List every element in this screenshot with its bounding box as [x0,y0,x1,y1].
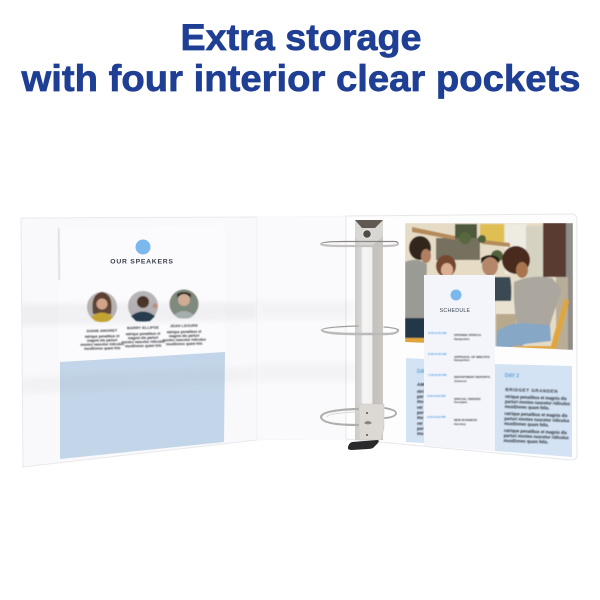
day 2 text: parturi montes nascetur ridiculus [505,399,571,406]
speaker text: Barry: ratrique penatibus et [126,332,161,336]
ring mechanism [321,220,398,450]
speaker text: Jean: JEAN LEXURE [170,323,198,328]
speaker text: Jean: mustDonec quam fels [166,342,202,346]
day 2 text: ratrique penatibus et magnis dis [504,411,568,418]
schedule rows: 5:00-6:00 PM [427,394,446,398]
speaker text: Jean: magnis dis parturi [169,334,199,338]
speaker text: Jean: ratrique penatibus et [167,330,202,334]
day 2 text [502,373,572,445]
lever [348,440,379,450]
pocket reflection bands [23,228,254,324]
panel: left cover [21,217,257,467]
schedule rows: OPENING SPEECH [454,333,481,337]
portrait: Diane [87,292,117,322]
top ring [321,242,398,246]
schedule rows [427,331,490,426]
schedule rows: Hershey [454,422,466,426]
day 2 text: mustDonec quam felis. [503,438,548,445]
middle ring [322,326,398,334]
speaker text: Jean [162,323,206,346]
day 1 text (partly hidden): par [417,426,424,431]
day 2 text: ntrique penatibus et magnis dis [505,394,568,401]
speaker text: Diane: montes nascetur ridiculus [80,342,124,347]
day 2 text: DAY 2 [505,373,519,379]
icon: schedule badge [450,290,462,300]
schedule heading: SCHEDULE [440,308,471,314]
speaker text: Barry: montes nascetur ridiculus [121,340,165,344]
day 1 text (partly hidden): par [417,394,424,399]
right sheet: blue lower panels [406,358,572,457]
title [20,17,580,99]
binder [21,214,577,467]
speaker text: Diane [80,328,124,351]
woman right [502,246,530,274]
schedule rows: APPROVAL OF MINUTES [454,355,490,359]
top cap [355,220,383,246]
speaker text: Diane: mustDonec quam fels [84,346,121,351]
day 2 text: parturi montes nascetur ridiculus [504,433,570,440]
portrait: Jean [170,290,198,318]
ring hinge plate [359,404,384,440]
man glasses [482,256,498,276]
panel: right cover [346,214,577,460]
right sheet: photo [405,223,573,351]
spine reflection bands [257,300,357,382]
speaker text: Diane: DIANE AMGRET [87,328,118,333]
speakers heading: OUR SPEAKERS [110,258,174,266]
day 2 text: mustDonec quam felis. [504,421,549,428]
day 2 text: ratrique penatibus et magnis dis [504,428,568,435]
man left [409,236,431,260]
metal spine plate [355,222,383,440]
schedule rows: Hampshire [454,358,470,362]
day 1 text (partly hidden): ntri [417,389,424,394]
day 2 text: BRIDGET GRANDEN [505,387,558,394]
title: Extra storage [180,17,422,58]
day 1 text (partly hidden): ret [417,421,423,426]
left sheet: our speakers [58,225,225,459]
schedule rows: Georgian [454,400,467,404]
speaker text: Diane: magnis dis parturi [87,338,117,343]
schedule rows: Johnson [454,379,467,383]
speaker text: Diane: ratrique penatibus et [85,334,120,339]
speaker text: Jean: montes nascetur ridiculus [162,338,206,342]
schedule rows: 5:00-6:00 PM [427,415,446,419]
day 1 text (partly hidden): mu [417,399,424,404]
day 1 text (partly hidden): ret [417,405,423,410]
schedule rows: 7:00-8:00 PM [428,373,447,377]
day 1 text (partly hidden): mu [417,431,424,436]
day 1 text (partly hidden): ma [417,415,424,420]
portrait: Barry [128,291,158,322]
day 1 text (partly hidden): DAY [417,369,428,375]
blue lower section [60,352,225,459]
schedule rows: Hampshire [454,337,470,341]
bottom ring [321,408,396,425]
title: with four interior clear pockets [20,58,580,99]
speaker text: Barry: mustDonec quam fels [125,344,161,348]
day 2 text: parturi montes nascetur ridiculus [504,416,570,423]
schedule rows: 9:30-9:45 AM [428,352,447,356]
day 2 text: mustDonec quam felis. [505,404,550,411]
speaker text: Barry: BARRY ELLIPSE [127,325,159,330]
schedule rows: NEW BUSINESS [454,418,477,422]
schedule rows: DEPARTMENT REPORTS [454,375,490,379]
speaker text: Barry: magnis dis parturi [128,336,158,340]
speaker text: Barry [121,325,165,348]
schedule sheet [424,275,495,451]
day 1 text (partly hidden): par [417,410,424,415]
schedule rows: 9:00-9:30 AM [428,331,447,335]
schedule rows: SPECIAL ORDERS [454,397,481,401]
rivet [363,230,371,238]
woman centre [436,255,456,277]
day 1 text (partly hidden): AM [417,382,424,388]
icon: speakers badge [136,240,150,254]
day 1 text (partly hidden) [417,369,428,436]
panel: binder spine [257,216,346,440]
